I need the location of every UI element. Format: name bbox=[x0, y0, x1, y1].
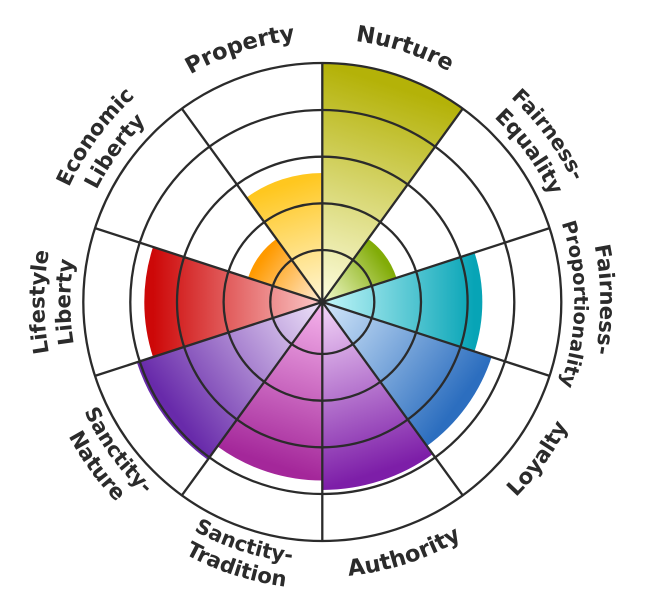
label: Lifestyle Liberty: Liberty bbox=[54, 258, 77, 344]
label: Lifestyle Liberty bbox=[29, 251, 77, 354]
sector: Authority bbox=[322, 302, 433, 490]
sector: Sanctity-Tradition bbox=[217, 302, 322, 480]
sector: Sanctity-Nature bbox=[137, 302, 322, 460]
label: Property: Property bbox=[184, 28, 294, 74]
label: Fairness-Equality: Equality bbox=[495, 108, 562, 192]
label: Fairness-Proportionality: Fairness- bbox=[595, 244, 616, 354]
sector: Lifestyle Liberty bbox=[144, 247, 322, 357]
label: Authority: Authority bbox=[348, 528, 458, 576]
label: Lifestyle Liberty: Lifestyle bbox=[29, 251, 50, 354]
sector: Fairness-Equality bbox=[322, 239, 396, 302]
sector: Nurture bbox=[322, 63, 463, 302]
label: Loyalty: Loyalty bbox=[506, 420, 568, 496]
label: Sanctity-Tradition bbox=[190, 519, 292, 586]
sector: Economic Liberty bbox=[248, 239, 322, 302]
label: Sanctity-Nature: Nature bbox=[69, 430, 122, 500]
label: Sanctity-Tradition: Tradition bbox=[190, 540, 285, 586]
label: Economic Liberty: Economic bbox=[56, 89, 134, 186]
label: Fairness-Equality: Fairness- bbox=[512, 88, 579, 179]
sector: Loyalty bbox=[322, 302, 492, 446]
label: Fairness-Proportionality: Proportionality bbox=[558, 220, 590, 388]
label: Nurture: Nurture bbox=[357, 25, 452, 70]
label: Economic Liberty: Liberty bbox=[84, 114, 144, 188]
label: Sanctity-Tradition: Sanctity- bbox=[196, 519, 292, 564]
sector: Fairness-Proportionality bbox=[322, 253, 482, 351]
label: Fairness-Proportionality bbox=[558, 220, 616, 388]
label: Fairness-Equality bbox=[495, 88, 579, 192]
label: Sanctity-Nature: Sanctity- bbox=[86, 407, 149, 491]
sector: Property bbox=[246, 173, 322, 302]
concentric ring grid bbox=[83, 63, 561, 541]
radial spokes bbox=[95, 63, 550, 541]
